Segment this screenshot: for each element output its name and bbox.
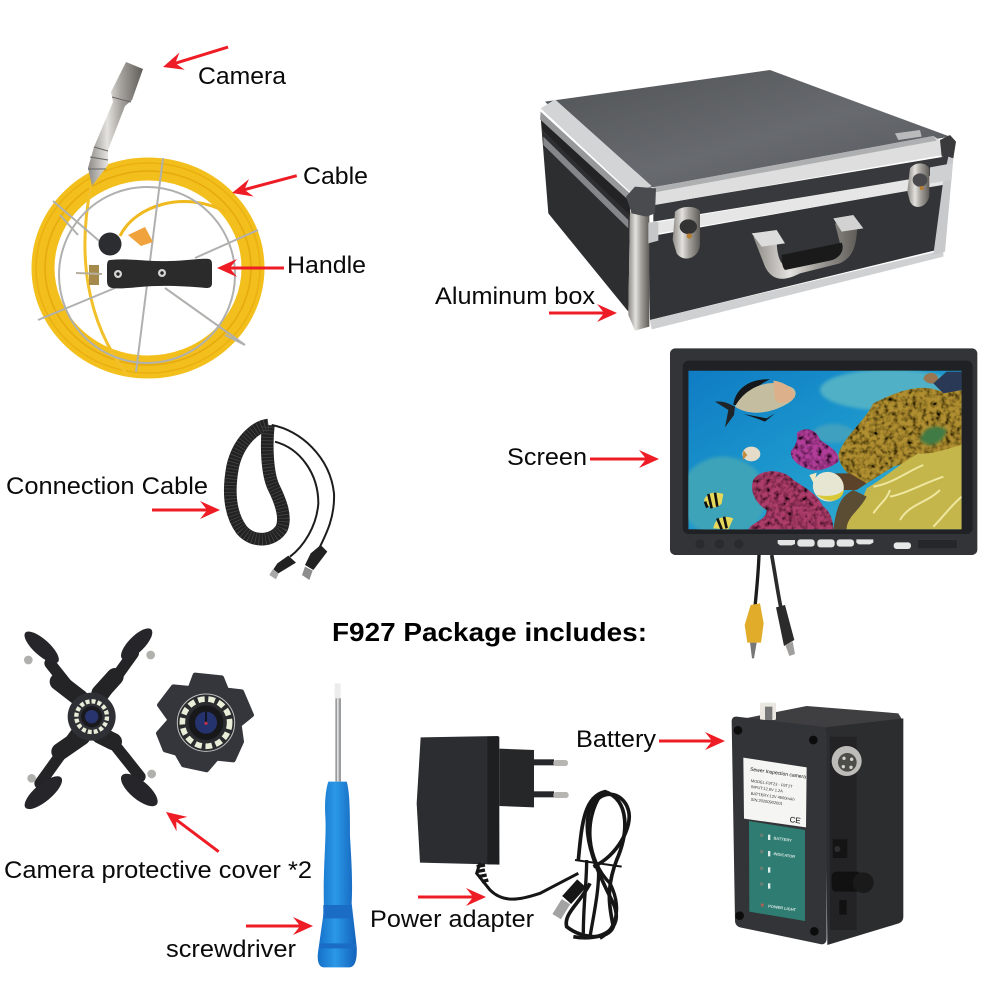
left side panel [541, 117, 630, 312]
arrow: to screen [590, 450, 659, 468]
screen image: underwater reef [680, 369, 962, 537]
front face [732, 717, 827, 944]
product: cable reel with camera and handle [36, 62, 260, 376]
icon: yellow cable coil [36, 163, 260, 376]
RCA and power cables [745, 555, 795, 658]
white spec label: INPUT:12.6V 1.2A [751, 784, 784, 794]
striped fish [704, 493, 733, 529]
icon: orange tag and black ball [76, 227, 153, 285]
green indicator panel: INDICATOR [773, 851, 796, 859]
product: monitor screen with cables [670, 348, 977, 658]
adapter pins [534, 759, 569, 798]
top connector [760, 703, 776, 720]
arrow: to screwdriver [246, 917, 313, 935]
arrow: to handle [217, 259, 284, 277]
product: aluminum case [540, 70, 956, 331]
right latch [907, 163, 952, 207]
label: Cable: Cable [303, 163, 368, 190]
case handle [752, 215, 863, 279]
arrow: to battery [659, 732, 725, 750]
silver rails and corners [540, 99, 956, 331]
label: Power adapter: Power adapter [370, 906, 534, 933]
product: camera protective covers [20, 624, 252, 814]
icon: inspection camera head [88, 62, 143, 186]
green indicator panel: BATTERY [773, 835, 792, 843]
coil body [230, 425, 283, 539]
arrow: to protective cover [161, 805, 224, 859]
side connector and controls [832, 746, 874, 915]
small fish [742, 447, 760, 461]
label: Camera: Camera [198, 63, 286, 90]
product: blue screwdriver [318, 683, 357, 967]
yellow-brown coral [838, 388, 962, 483]
label: Connection Cable: Connection Cable [6, 473, 208, 500]
monitor buttons [696, 539, 957, 549]
arrow: to aluminum box [549, 304, 617, 322]
purple coral [791, 429, 839, 470]
monitor bezel [670, 348, 977, 555]
screwdriver shaft [335, 683, 341, 782]
arrow: to cable [230, 167, 299, 202]
round cover with LEDs [158, 675, 252, 770]
green indicator panel: POWER LIGHT [768, 903, 797, 912]
heading: F927 Package includes: [332, 617, 647, 647]
pink coral [748, 471, 833, 529]
coiled cord and plug [477, 792, 629, 938]
label: Battery: Battery [576, 726, 657, 753]
icon: steel reel frame [38, 158, 258, 372]
product: coiled connection cable [230, 425, 334, 580]
label: Screen: Screen [507, 444, 587, 471]
arrow: to connection cable [152, 501, 220, 519]
green indicator panel [749, 821, 805, 921]
left latch [648, 207, 700, 259]
product: battery box [732, 703, 903, 945]
icon: black handle [107, 259, 212, 288]
front panel [648, 156, 948, 329]
label: Camera protective cover *2: Camera protective cover *2 [4, 857, 312, 884]
box top and side [745, 706, 903, 945]
X-shaped cover [20, 624, 163, 814]
cable leads and plugs [269, 425, 334, 580]
adapter body [417, 736, 534, 865]
product: power adapter [417, 736, 629, 938]
yellow fish [809, 472, 844, 502]
lettuce coral [846, 445, 962, 529]
arrow: to power adapter [418, 888, 486, 906]
lid top [545, 70, 950, 190]
label: Handle: Handle [287, 252, 366, 279]
label: Aluminum box: Aluminum box [435, 283, 595, 310]
white spec label: Sewer Inspection camera [750, 767, 806, 781]
white spec label: MODEL:F9T23 - F9T1T [751, 778, 793, 789]
white spec label [743, 758, 807, 827]
arrow: to camera [160, 39, 231, 76]
label: screwdriver: screwdriver [166, 936, 296, 963]
screwdriver handle [318, 782, 357, 967]
white spec label: BATTERY:12V 4500mAh [751, 791, 795, 802]
white spec label: S/N:20200902001 [751, 797, 784, 806]
white spec label: CE [789, 815, 801, 826]
large fish [715, 379, 796, 427]
